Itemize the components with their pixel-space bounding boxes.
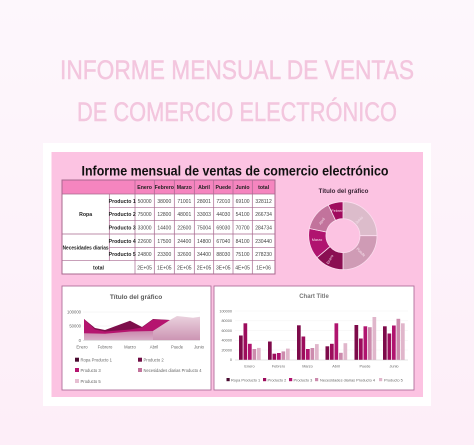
- data table: 48001: [177, 212, 191, 218]
- donut chart: Febrero: [331, 209, 345, 213]
- data table: 2E+05: [197, 266, 212, 272]
- area chart panel: 0: [79, 338, 82, 343]
- sheet heading: Informe mensual de ventas de comercio electrónico: [82, 164, 388, 178]
- data table: Ropa: [79, 212, 92, 218]
- bar chart panel: 80000: [221, 319, 232, 323]
- data table: 84100: [236, 239, 250, 245]
- data table: 72010: [216, 199, 230, 205]
- bar chart panel: 40000: [221, 338, 232, 342]
- data table: Producto 4: [109, 239, 136, 245]
- data table: 75100: [236, 252, 250, 258]
- data table: 4E+05: [235, 266, 250, 272]
- area legend: Necesidades diarias Producto 4: [144, 368, 202, 373]
- bar legend: Ropa Producto 1: [231, 377, 260, 382]
- donut chart: Abril: [318, 217, 326, 226]
- bar chart panel: Junio: [389, 364, 399, 368]
- data table: 22600: [138, 239, 152, 245]
- data table: 44030: [216, 212, 230, 218]
- bar chart panel: Enero: [244, 364, 255, 368]
- data table: Producto 2: [109, 212, 136, 218]
- bar legend: Producto 2: [268, 377, 286, 382]
- data table: [62, 180, 275, 274]
- data table: 75000: [138, 212, 152, 218]
- donut chart: Enero: [326, 254, 334, 265]
- bar chart panel: 20000: [221, 348, 232, 352]
- data table: 32600: [177, 252, 191, 258]
- data table: 24800: [138, 252, 152, 258]
- donut chart: Puede: [355, 247, 366, 258]
- area legend: Ropa Producto 1: [80, 358, 113, 362]
- title: INFORME MENSUAL DE VENTAS: [60, 55, 414, 85]
- data table: 38000: [157, 199, 171, 205]
- bar chart panel: Puede: [360, 364, 370, 368]
- data table: 71001: [177, 199, 191, 205]
- area chart panel: Puede: [171, 344, 184, 350]
- area chart panel: [62, 286, 211, 390]
- donut chart: [309, 188, 377, 270]
- bars: series 3: [248, 323, 396, 360]
- bar legend: Producto 3: [294, 377, 312, 382]
- data table: Producto 3: [109, 226, 136, 232]
- data table: 88030: [216, 252, 230, 258]
- data table: total: [258, 185, 270, 191]
- bar chart panel: [214, 286, 414, 390]
- bar chart panel: 100000: [219, 310, 232, 314]
- bar chart panel: 60000: [221, 329, 232, 333]
- bar chart panel: Marzo: [302, 364, 313, 368]
- data table: Febrero: [155, 185, 174, 191]
- area legend: [75, 358, 202, 384]
- data table: 22600: [177, 226, 191, 232]
- data table: Abril: [198, 185, 210, 191]
- data table: 70700: [236, 226, 250, 232]
- data table: 50000: [138, 199, 152, 205]
- data table: Junio: [236, 185, 250, 191]
- area chart panel: Junio: [194, 344, 205, 350]
- data table: 1E+06: [256, 266, 271, 272]
- bar chart panel: 0: [230, 358, 232, 362]
- title: [60, 55, 414, 127]
- area legend: Producto 3: [80, 368, 101, 373]
- bars: series 2: [244, 323, 391, 360]
- data table: 75004: [197, 226, 211, 232]
- data table: 54100: [236, 212, 250, 218]
- data table: Enero: [137, 185, 152, 191]
- donut chart: Título del gráfico: [319, 188, 369, 195]
- data table: 14400: [157, 226, 171, 232]
- area legend: Producto 2: [144, 358, 164, 362]
- data table: 230440: [255, 239, 272, 245]
- data table: 3E+05: [216, 266, 231, 272]
- area chart panel: 100000: [67, 310, 82, 314]
- donut chart: Junio: [355, 216, 364, 225]
- data table: Producto 1: [109, 199, 136, 205]
- area chart panel: Enero: [76, 344, 88, 350]
- bar chart panel: Abril: [332, 364, 340, 368]
- data table: 284734: [255, 226, 272, 232]
- title: DE COMERCIO ELECTRÓNICO: [77, 96, 397, 127]
- data table: 278230: [255, 252, 272, 258]
- bars: series 5: [257, 317, 405, 360]
- data table: 28001: [197, 199, 211, 205]
- bar chart panel: Febrero: [272, 364, 285, 368]
- data table: Producto 5: [109, 252, 136, 258]
- bar legend: [226, 377, 403, 382]
- data table: 33003: [197, 212, 211, 218]
- area chart panel: Febrero: [98, 344, 113, 350]
- area series: [84, 316, 200, 340]
- data table: 69030: [216, 226, 230, 232]
- bars: series 1: [239, 325, 387, 360]
- data table: total: [93, 266, 105, 272]
- pink panel: [52, 152, 423, 397]
- data table: 24400: [177, 239, 191, 245]
- area chart panel: Marzo: [124, 344, 136, 350]
- data table: 2E+05: [137, 266, 152, 272]
- data table: 17500: [157, 239, 171, 245]
- data table: Puede: [216, 185, 231, 191]
- area chart panel: Título del gráfico: [110, 294, 162, 301]
- data table: 23300: [157, 252, 171, 258]
- bars: series 4: [252, 319, 400, 360]
- data table: 12800: [157, 212, 171, 218]
- bar legend: Necesidades diarias Producto 4: [320, 377, 376, 382]
- area chart panel: 50000: [69, 324, 82, 328]
- data table: 2E+05: [177, 266, 192, 272]
- area chart panel: Abril: [150, 344, 158, 350]
- data table: 33000: [138, 226, 152, 232]
- data table: 34400: [197, 252, 211, 258]
- donut chart: Marzo: [312, 238, 322, 242]
- data table: 67040: [216, 239, 230, 245]
- data table: 266734: [255, 212, 272, 218]
- data table: 14800: [197, 239, 211, 245]
- bar chart panel: Chart Title: [299, 294, 329, 300]
- data table: Marzo: [177, 185, 192, 191]
- data table: 328112: [255, 199, 272, 205]
- area legend: Producto 5: [80, 379, 101, 384]
- white card: [43, 143, 431, 406]
- data table: 1E+05: [157, 266, 172, 272]
- data table: 69100: [236, 199, 250, 205]
- bar legend: Producto 5: [384, 377, 403, 382]
- data table: Necesidades diarias: [63, 246, 109, 252]
